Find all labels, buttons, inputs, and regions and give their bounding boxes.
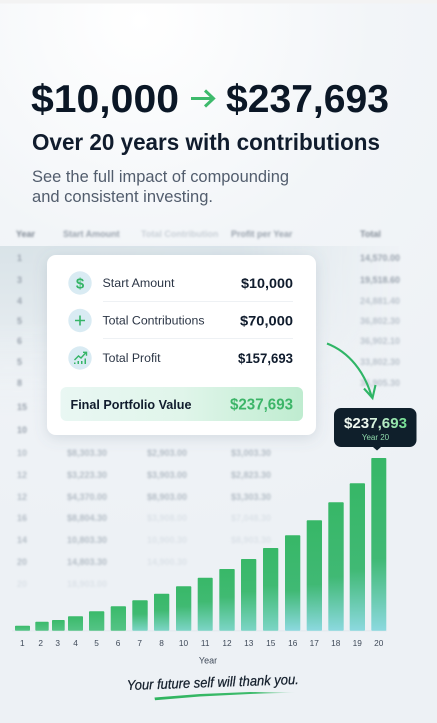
x axis labels: 7 bbox=[137, 638, 142, 648]
title: start value to final value bbox=[31, 78, 389, 121]
blurred background table: 19,518.60 bbox=[360, 275, 400, 285]
blurred background table: $8,804.30 bbox=[67, 513, 107, 523]
x axis labels: 10 bbox=[179, 638, 188, 648]
blurred background table: $3,223.30 bbox=[67, 470, 107, 480]
row: total contributions: Total Contributions bbox=[102, 314, 204, 328]
blurred background table: Profit per Year bbox=[231, 229, 293, 239]
x axis labels: 8 bbox=[159, 638, 164, 648]
subtitle: Over 20 years with contributions bbox=[32, 129, 380, 155]
blurred background table: $3,903.00 bbox=[147, 470, 187, 480]
blurred background table: 20 bbox=[17, 557, 27, 567]
blurred background table: $3,003.30 bbox=[231, 448, 271, 458]
x axis labels: 16 bbox=[288, 638, 298, 648]
x axis title: Year bbox=[199, 656, 217, 666]
blurred background table: 5 bbox=[17, 316, 22, 326]
blurred background table: 20 bbox=[17, 579, 27, 589]
x axis labels: 18 bbox=[331, 638, 341, 648]
blurred background table: 1 bbox=[17, 253, 22, 263]
summary card bbox=[47, 255, 316, 435]
final portfolio value bbox=[60, 387, 303, 421]
tooltip: year 20 value: Year 20 bbox=[362, 433, 390, 442]
x axis labels: 3 bbox=[55, 638, 60, 648]
blurred background table: 8 bbox=[17, 378, 22, 388]
blurred background table: 10 bbox=[17, 448, 27, 458]
blurred background table: Total bbox=[360, 229, 381, 239]
x axis labels: 11 bbox=[201, 638, 210, 648]
tagline: Your future self will thank you. bbox=[127, 671, 299, 693]
blurred background table: 10,900.30 bbox=[147, 535, 187, 545]
blurred background table: $8,303.30 bbox=[67, 448, 107, 458]
x axis labels: 17 bbox=[310, 638, 319, 648]
blurred background table: Total Contribution bbox=[141, 229, 218, 239]
blurred background table: 14 bbox=[17, 535, 27, 545]
row: total contributions bbox=[68, 309, 293, 332]
title: start value to final value: $237,693 bbox=[226, 78, 389, 121]
row: total profit bbox=[68, 346, 293, 370]
title: start value to final value: $10,000 bbox=[31, 78, 179, 121]
arrow to final bar bbox=[327, 344, 376, 398]
description text: and consistent investing. bbox=[32, 188, 213, 206]
x axis labels: 5 bbox=[94, 638, 99, 648]
blurred background table: 33,802.30 bbox=[360, 357, 400, 367]
blurred background table: 4 bbox=[17, 296, 22, 306]
blurred background table: 36,802.30 bbox=[360, 316, 400, 326]
blurred background table: 36,902.10 bbox=[360, 336, 400, 346]
blurred background table: $7,048.30 bbox=[231, 513, 271, 523]
blurred background table bbox=[0, 229, 437, 589]
blurred background table: $8,903.00 bbox=[147, 492, 187, 502]
row: start amount: Start Amount bbox=[102, 276, 175, 290]
blurred background table: $8,903.30 bbox=[231, 535, 271, 545]
blurred background table: 3 bbox=[17, 275, 22, 285]
blurred background table: $4,370.00 bbox=[67, 492, 107, 502]
x axis labels: 1 bbox=[20, 638, 25, 648]
tooltip: year 20 value bbox=[334, 408, 416, 450]
final portfolio value: $237,693 bbox=[230, 396, 293, 414]
blurred background table: Year bbox=[16, 229, 36, 239]
blurred background table: 5 bbox=[17, 357, 22, 367]
blurred background table: 15 bbox=[17, 402, 27, 412]
blurred background table: $3,303.30 bbox=[231, 492, 271, 502]
x axis labels: 15 bbox=[266, 638, 276, 648]
blurred background table: 12 bbox=[17, 470, 27, 480]
blurred background table: 6 bbox=[17, 336, 22, 346]
blurred background table: 14,803.30 bbox=[67, 557, 107, 567]
row: total profit: $157,693 bbox=[238, 350, 293, 366]
x axis labels: 13 bbox=[244, 638, 254, 648]
blurred background table: 12 bbox=[17, 492, 27, 502]
blurred background table: 10,803.30 bbox=[67, 535, 107, 545]
tooltip: year 20 value: $237,693 bbox=[344, 415, 407, 432]
blurred background table: 14,900.30 bbox=[147, 557, 187, 567]
x axis labels: 6 bbox=[116, 638, 121, 648]
x axis labels: 4 bbox=[73, 638, 78, 648]
blurred background table: Start Amount bbox=[63, 229, 120, 239]
bar chart bbox=[12, 458, 387, 666]
blurred background table: $3,908.00 bbox=[147, 513, 187, 523]
blurred background table: 18,903.00 bbox=[67, 579, 107, 589]
description text bbox=[32, 168, 289, 206]
row: total contributions: $70,000 bbox=[240, 312, 293, 328]
row: total profit: Total Profit bbox=[102, 351, 161, 365]
blurred background table: 36,905.30 bbox=[360, 378, 400, 388]
x axis labels: 2 bbox=[38, 638, 43, 648]
row: start amount: $10,000 bbox=[241, 275, 293, 291]
x axis labels bbox=[20, 638, 384, 648]
blurred background table: 16 bbox=[17, 513, 27, 523]
blurred background table: $2,823.30 bbox=[231, 470, 271, 480]
blurred background table: 10 bbox=[17, 425, 27, 435]
x axis labels: 20 bbox=[374, 638, 384, 648]
blurred background table: $2,903.00 bbox=[147, 448, 187, 458]
blurred background table: 24,881.40 bbox=[360, 296, 400, 306]
row: start amount bbox=[68, 271, 293, 295]
x axis labels: 12 bbox=[222, 638, 232, 648]
blurred background table: 14,570.00 bbox=[360, 253, 400, 263]
underline stroke bbox=[154, 692, 297, 700]
tagline bbox=[127, 671, 299, 700]
description text: See the full impact of compounding bbox=[32, 168, 289, 186]
row: start amount: $ bbox=[76, 276, 85, 292]
x axis labels: 19 bbox=[353, 638, 362, 648]
final portfolio value: Final Portfolio Value bbox=[70, 397, 192, 412]
